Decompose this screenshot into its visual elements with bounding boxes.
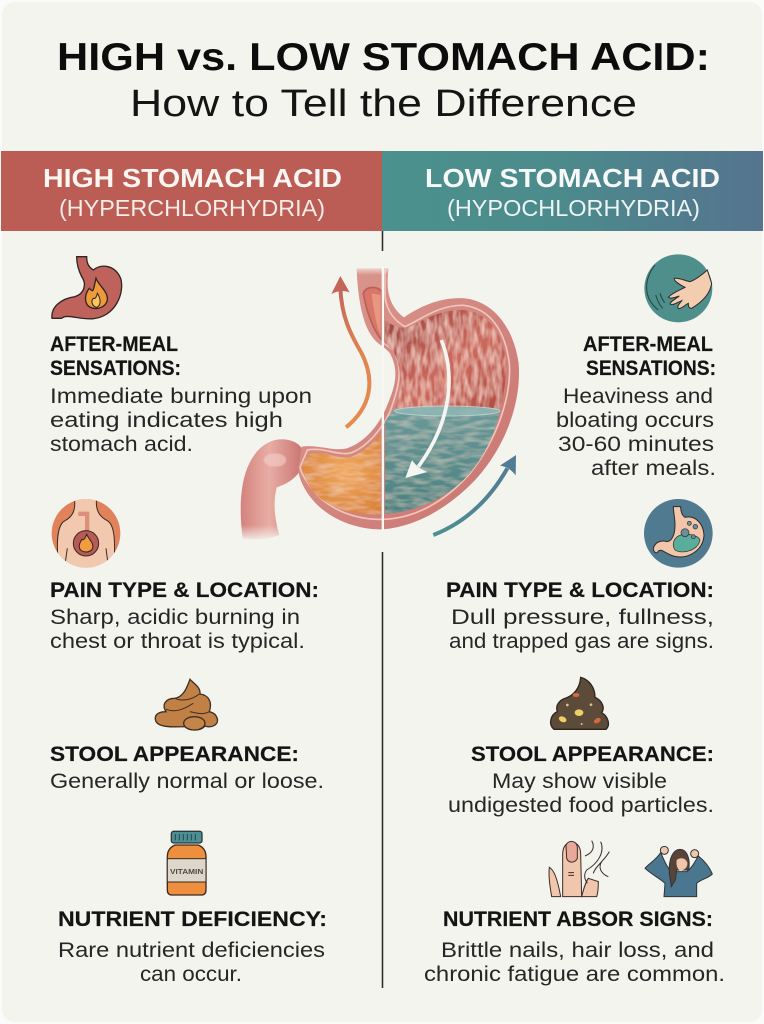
icon: vitamin bottle: VITAMIN xyxy=(170,867,203,876)
section: low after-meal sensations xyxy=(556,254,716,480)
arrow: food sinking xyxy=(405,340,449,478)
icon: stomach with gas xyxy=(644,499,713,568)
heading: PAIN TYPE & LOCATION: xyxy=(446,579,714,602)
text block xyxy=(449,606,714,653)
section: high stool appearance xyxy=(50,679,324,793)
text block xyxy=(50,385,312,456)
text block: chronic fatigue are common. xyxy=(424,963,725,986)
section: high after-meal sensations xyxy=(50,257,312,456)
title xyxy=(57,36,710,125)
stomach outer wall xyxy=(298,268,519,529)
text block: after meals. xyxy=(591,457,716,480)
heading xyxy=(583,333,716,380)
icon: normal stool xyxy=(155,679,218,730)
text block: 30-60 minutes xyxy=(558,433,714,456)
esophagus lumen xyxy=(363,287,382,340)
orange lower left chamber xyxy=(302,433,381,514)
text block: Brittle nails, hair loss, and xyxy=(441,939,714,962)
teal acid pool xyxy=(385,408,500,514)
heading: AFTER-MEAL xyxy=(50,333,178,356)
heading: NUTRIENT DEFICIENCY: xyxy=(58,908,327,931)
section: low nutrient absorption signs xyxy=(424,841,725,986)
text block: Generally normal or loose. xyxy=(50,770,324,793)
heading: STOOL APPEARANCE: xyxy=(50,743,299,766)
text block xyxy=(58,939,325,986)
text block: can occur. xyxy=(140,963,242,986)
section: low pain type and location xyxy=(446,499,714,653)
centre divider xyxy=(382,267,384,530)
panel: low stomach acid header: (HYPOCHLORHYDRIA) xyxy=(447,195,700,221)
text block xyxy=(556,385,716,480)
icon: fatigued person xyxy=(645,846,712,897)
text block: Immediate burning upon xyxy=(50,385,312,408)
text block: Heaviness and xyxy=(563,385,713,408)
panel: high stomach acid header: (HYPERCHLORHYDRIA) xyxy=(59,195,325,221)
title: How to Tell the Difference xyxy=(130,83,637,125)
panel: high stomach acid header xyxy=(1,151,382,231)
text block: chest or throat is typical. xyxy=(50,630,305,653)
text block: eating indicates high xyxy=(50,409,283,432)
heading: STOOL APPEARANCE: xyxy=(471,743,714,766)
text block: Dull pressure, fullness, xyxy=(451,606,714,629)
text block: Sharp, acidic burning in xyxy=(50,606,300,629)
panel: low stomach acid header: LOW STOMACH ACID xyxy=(425,163,720,193)
text block: and trapped gas are signs. xyxy=(449,630,714,653)
icon: vitamin bottle xyxy=(167,831,206,895)
text block xyxy=(424,939,725,986)
icon: hand on belly xyxy=(644,254,712,322)
text block: stomach acid. xyxy=(50,433,193,456)
heading: SENSATIONS: xyxy=(586,357,716,380)
stomach illustration xyxy=(237,265,519,542)
text block xyxy=(50,606,305,653)
text block: May show visible xyxy=(492,770,667,793)
duodenum xyxy=(241,439,304,539)
panel: high stomach acid header: HIGH STOMACH ACID xyxy=(43,163,342,193)
arrow: acid reflux up xyxy=(331,276,369,427)
icon: stool with food particles xyxy=(551,677,608,729)
heading: NUTRIENT ABSOR SIGNS: xyxy=(443,908,713,931)
text block: Rare nutrient deficiencies xyxy=(58,939,325,962)
title: HIGH vs. LOW STOMACH ACID: xyxy=(57,36,710,79)
heading: AFTER-MEAL xyxy=(583,333,713,356)
icon: chest with flame xyxy=(52,498,120,570)
red upper chamber xyxy=(385,310,506,410)
heading: SENSATIONS: xyxy=(50,357,181,380)
heading xyxy=(50,333,181,380)
text block xyxy=(448,770,714,817)
arrow: slow movement up xyxy=(433,455,516,535)
section: low stool appearance xyxy=(448,677,714,817)
text block: undigested food particles. xyxy=(448,794,714,817)
text block: bloating occurs xyxy=(556,409,714,432)
panel: low stomach acid header xyxy=(382,151,763,231)
section: high pain type and location xyxy=(50,498,319,653)
heading: PAIN TYPE & LOCATION: xyxy=(50,579,319,602)
section: high nutrient deficiency xyxy=(58,831,327,986)
icon: stomach with flame xyxy=(52,257,122,319)
icon: brittle nails and hair loss xyxy=(549,841,609,897)
